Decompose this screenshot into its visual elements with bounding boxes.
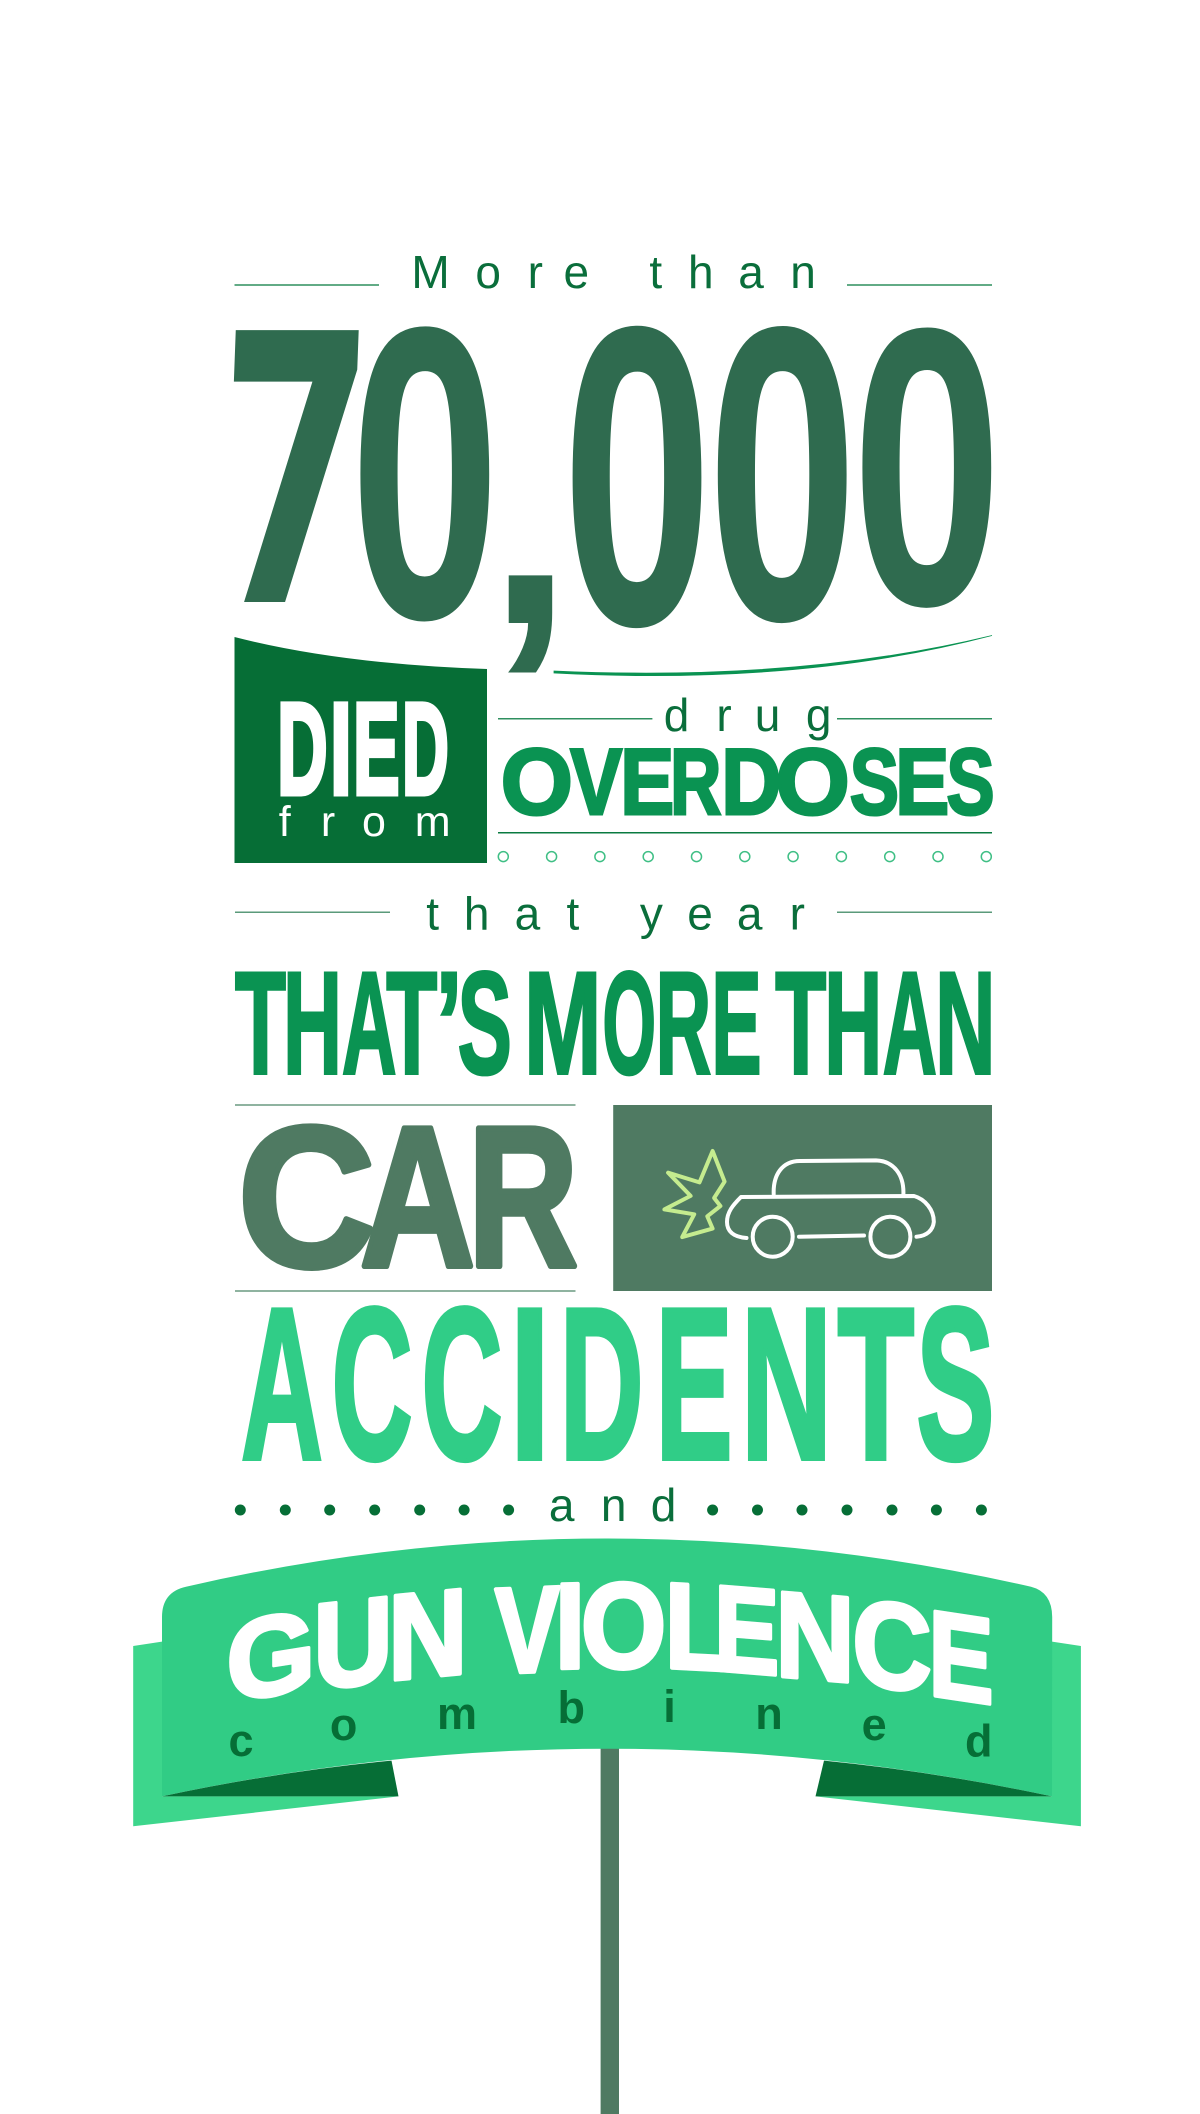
banner left tail bbox=[133, 1642, 398, 1826]
banner bbox=[133, 1538, 1081, 1826]
big number: 70,000 bbox=[207, 237, 1002, 715]
big number: 70,000: 0 bbox=[852, 246, 1002, 688]
word: CAR with rules: C bbox=[238, 1086, 375, 1309]
word: ACCIDENTS: D bbox=[560, 1262, 644, 1504]
banner text: GUN VIOLENCE: E bbox=[714, 1561, 779, 1702]
dotted divider with and bbox=[235, 1479, 987, 1531]
word: ACCIDENTS: C bbox=[332, 1262, 412, 1504]
banner text: GUN VIOLENCE: N bbox=[775, 1565, 855, 1709]
word: CAR with rules: R bbox=[468, 1086, 578, 1309]
icon: car bbox=[727, 1160, 934, 1257]
word: DIED: I bbox=[330, 675, 352, 822]
dotted divider with and: and bbox=[549, 1479, 676, 1531]
banner text: GUN VIOLENCE: L bbox=[664, 1557, 732, 1697]
word: CAR with rules bbox=[235, 1086, 578, 1309]
heading: THAT'S MORE THAN: T bbox=[235, 942, 286, 1104]
heading: More than: More than bbox=[411, 246, 816, 298]
word: from: from bbox=[279, 798, 451, 846]
banner right tail bbox=[816, 1642, 1081, 1826]
big number: 70,000: 0 bbox=[562, 237, 713, 715]
word: OVERDOSES: O bbox=[776, 729, 850, 834]
word: ACCIDENTS: N bbox=[741, 1262, 832, 1504]
heading: THAT'S MORE THAN: N bbox=[935, 942, 996, 1104]
banner text: GUN VIOLENCE bbox=[226, 1557, 994, 1731]
rule and open dots bbox=[498, 833, 992, 862]
text: that year: that year bbox=[426, 887, 805, 939]
banner right fold bbox=[816, 1761, 1052, 1796]
banner text: GUN VIOLENCE: V bbox=[495, 1561, 560, 1700]
big number: 70,000: 0 bbox=[707, 239, 858, 708]
word: OVERDOSES: V bbox=[570, 729, 622, 834]
banner left fold bbox=[162, 1761, 398, 1796]
big number: 70,000: , bbox=[487, 334, 573, 691]
banner text: GUN VIOLENCE: U bbox=[313, 1571, 393, 1716]
word: ACCIDENTS: A bbox=[241, 1262, 323, 1504]
banner text: GUN VIOLENCE: G bbox=[226, 1586, 316, 1727]
heading: THAT'S MORE THAN: T bbox=[386, 942, 437, 1104]
big number: 70,000: 0 bbox=[350, 241, 500, 706]
signpost pole bbox=[601, 1748, 619, 2114]
swoosh under number bbox=[554, 636, 992, 676]
banner text: combined: combined bbox=[228, 1681, 993, 1767]
heading: THAT'S MORE THAN: A bbox=[883, 942, 937, 1104]
label: drug: drug bbox=[664, 689, 831, 741]
word: ACCIDENTS: S bbox=[916, 1262, 994, 1504]
banner main bbox=[162, 1538, 1052, 1796]
big number: 70,000: 7 bbox=[207, 255, 379, 690]
heading: THAT'S MORE THAN: H bbox=[824, 942, 882, 1104]
icon: crash burst bbox=[664, 1151, 725, 1237]
banner text: GUN VIOLENCE: O bbox=[581, 1558, 666, 1694]
heading: THAT'S MORE THAN: O bbox=[602, 942, 656, 1104]
panel: DIED from: D bbox=[402, 675, 449, 822]
word: CAR with rules: A bbox=[360, 1086, 475, 1309]
heading: THAT'S MORE THAN: M bbox=[524, 942, 602, 1104]
word: OVERDOSES: D bbox=[721, 729, 781, 834]
word: OVERDOSES: S bbox=[946, 729, 994, 834]
banner text: GUN VIOLENCE: C bbox=[852, 1573, 932, 1719]
word: OVERDOSES: E bbox=[620, 729, 674, 834]
word: OVERDOSES: E bbox=[895, 729, 949, 834]
heading: THAT'S MORE THAN: ’ bbox=[435, 942, 463, 1104]
banner text: GUN VIOLENCE: N bbox=[388, 1563, 467, 1707]
heading: THAT'S MORE THAN: S bbox=[458, 942, 512, 1104]
banner text: GUN VIOLENCE: I bbox=[555, 1557, 585, 1695]
word: ACCIDENTS: I bbox=[510, 1262, 550, 1504]
word: ACCIDENTS: T bbox=[838, 1262, 914, 1504]
word: ACCIDENTS: E bbox=[656, 1262, 732, 1504]
heading: THAT'S MORE THAN: A bbox=[342, 942, 397, 1104]
panel: car crash illustration bbox=[613, 1105, 992, 1291]
word: OVERDOSES: S bbox=[850, 729, 899, 834]
word: ACCIDENTS: C bbox=[422, 1262, 502, 1504]
panel: DIED from bbox=[234, 637, 487, 863]
banner text: GUN VIOLENCE: E bbox=[928, 1585, 994, 1731]
heading: THAT'S MORE THAN: R bbox=[656, 942, 711, 1104]
word: DIED: D bbox=[277, 675, 328, 822]
heading: THAT'S MORE THAN: H bbox=[283, 942, 342, 1104]
heading: THAT'S MORE THAN: E bbox=[711, 942, 762, 1104]
word: OVERDOSES: O bbox=[501, 729, 573, 834]
word: OVERDOSES: R bbox=[670, 729, 721, 834]
word: DIED: E bbox=[353, 675, 400, 822]
heading: THAT'S MORE THAN: T bbox=[775, 942, 826, 1104]
